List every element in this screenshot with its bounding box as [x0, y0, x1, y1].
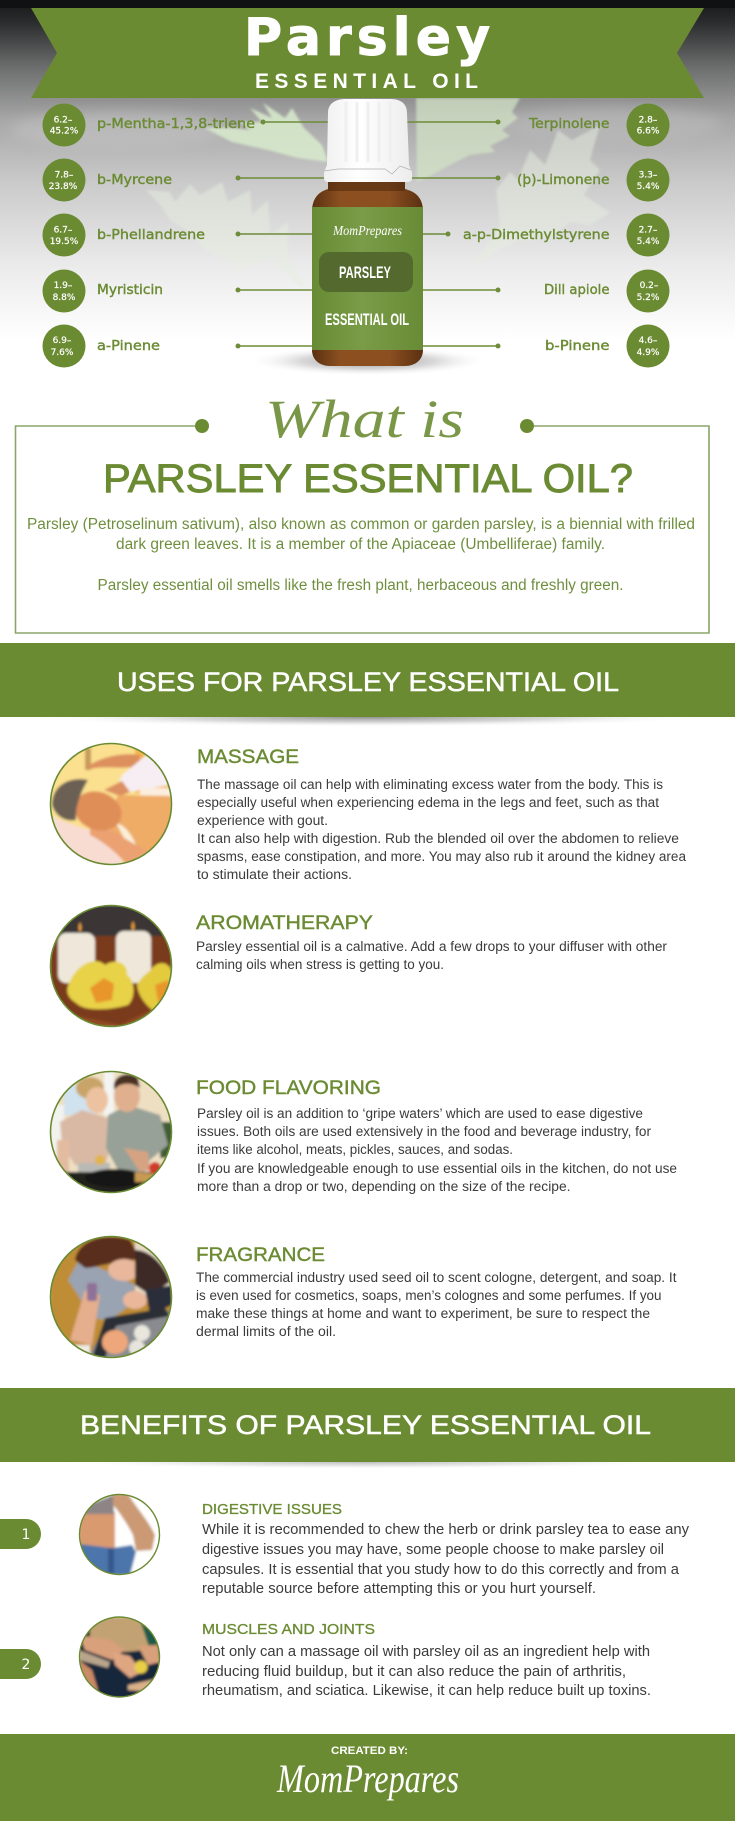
text: massage: MASSAGE	[197, 747, 299, 768]
bottle label: essential oil: ESSENTIAL OIL	[325, 310, 409, 329]
text: muscles and joints: reducing fluid buildup, but it can also reduce the pain of arthritis,	[202, 1664, 626, 1680]
footer	[0, 1734, 735, 1821]
tab: number 1: 1	[22, 1527, 30, 1543]
bottle shadow	[246, 346, 490, 376]
badge: Dill apiole: 0.2–	[640, 281, 659, 291]
description: dark green leaves. It is a member of the Apiaceae (Umbelliferae) family.	[116, 536, 605, 553]
photo: muscles and joints	[79, 1617, 162, 1698]
text: food flavoring: items like alcohol, meats, pickles, sauces, and sodas.	[197, 1142, 513, 1157]
section band: benefits	[0, 1388, 735, 1462]
text: digestive issues: While it is recommended to chew the herb or drink parsley tea to ease any	[202, 1522, 690, 1538]
badge: Myristicin: 8.8%	[53, 293, 76, 303]
text: massage: It can also help with digestion. Rub the blended oil over the abdomen to relieve	[197, 831, 679, 846]
text: muscles and joints	[202, 1622, 651, 1699]
badge: Limonene: 3.3–	[639, 170, 658, 180]
badge: Dill apiole: 5.2%	[637, 293, 660, 303]
text: massage: to stimulate their actions.	[197, 867, 352, 882]
icon: essential oil bottle	[312, 99, 423, 366]
badge: Terpinolene	[626, 104, 670, 146]
badge: a-Pinene: 6.9–	[53, 336, 72, 346]
text: massage	[197, 747, 686, 882]
badge: Myristicin: 1.9–	[54, 281, 73, 291]
badge: Terpinolene: 2.8–	[639, 116, 658, 126]
text: fragrance: dermal limits of the oil.	[196, 1324, 336, 1339]
badge: b-Phellandrene	[42, 214, 86, 256]
text: digestive issues: digestive issues you may have, some people choose to make parsley oil	[202, 1542, 664, 1558]
shadow under benefits band	[47, 1455, 687, 1469]
label: a-Pinene: a-Pinene	[97, 338, 160, 354]
shadow under uses band	[22, 707, 712, 727]
section band: benefits: BENEFITS OF PARSLEY ESSENTIAL OIL	[80, 1410, 651, 1440]
label: Dill apiole: Dill apiole	[544, 282, 610, 298]
text: digestive issues: capsules. It is essential that you study how to do this correctly and from a	[202, 1562, 680, 1578]
badge: b-Myrcene: 23.8%	[49, 182, 78, 192]
badge: Limonene	[626, 158, 670, 202]
text: fragrance: make these things at home and want to experiment, be sure to respect the	[196, 1306, 650, 1321]
badge: p-Mentha: 6.2–	[54, 116, 73, 126]
text: aromatherapy: calming oils when stress is getting to you.	[196, 957, 444, 972]
label: Dimethylstyrene: a-p-Dimethylstyrene	[463, 227, 610, 243]
title: Parsley	[244, 8, 490, 68]
text: muscles and joints: rheumatism, and sciatica. Likewise, it can help reduce built up toxins.	[202, 1683, 651, 1699]
badge: a-Pinene: 7.6%	[51, 348, 74, 358]
text: food flavoring: issues. Both oils are used extensively in the food and beverage industry, for	[197, 1124, 652, 1139]
bottle label: name: PARSLEY	[339, 263, 391, 282]
label: Limonene: (þ)-Limonene	[517, 172, 610, 188]
text: food flavoring: If you are knowledgeable enough to use essential oils in the kitchen, do not use	[197, 1161, 677, 1176]
text: aromatherapy: Parsley essential oil is a calmative. Add a few drops to your diffuser with other	[196, 939, 668, 954]
section band: uses	[0, 643, 735, 717]
text: fragrance	[196, 1245, 677, 1339]
subtitle: ESSENTIAL OIL	[255, 70, 478, 93]
badge: b-Myrcene: 7.8–	[55, 170, 74, 180]
badge: b-Pinene: 4.9%	[637, 348, 660, 358]
badge: a-Pinene	[42, 324, 86, 368]
badge: p-Mentha	[42, 104, 86, 146]
badge: Limonene: 5.4%	[637, 182, 660, 192]
text: fragrance: The commercial industry used seed oil to scent cologne, detergent, and soap. It	[196, 1270, 677, 1285]
heading: PARSLEY ESSENTIAL OIL?	[103, 457, 633, 501]
text: fragrance: is even used for cosmetics, soaps, men’s colognes and some perfumes. If you	[196, 1288, 662, 1303]
badge: Dimethylstyrene: 5.4%	[637, 237, 660, 247]
label: p-Mentha: p-Mentha-1,3,8-triene	[97, 116, 255, 132]
text: massage: experience with gout.	[197, 813, 328, 828]
badge: p-Mentha: 45.2%	[50, 126, 79, 136]
text: massage: The massage oil can help with eliminating excess water from the body. This is	[197, 777, 663, 792]
photo: digestive waist	[79, 1494, 160, 1575]
icon: parsley leaf top left	[205, 103, 328, 162]
text: muscles and joints: MUSCLES AND JOINTS	[202, 1622, 375, 1638]
section band: uses: USES FOR PARSLEY ESSENTIAL OIL	[117, 667, 619, 697]
label: b-Pinene: b-Pinene	[545, 338, 610, 354]
footer logo: MomPrepares	[276, 1756, 459, 1801]
text: digestive issues	[202, 1502, 690, 1597]
text: food flavoring	[196, 1078, 677, 1194]
badge: Dimethylstyrene: 2.7–	[639, 226, 658, 236]
banner: title ribbon	[31, 8, 704, 98]
chemical components right	[463, 104, 670, 368]
photo: food flavoring couple	[50, 1071, 174, 1194]
text: digestive issues: DIGESTIVE ISSUES	[202, 1502, 342, 1518]
label: b-Phellandrene: b-Phellandrene	[97, 227, 205, 243]
badge: b-Pinene: 4.6–	[639, 336, 658, 346]
badge: Dill apiole	[626, 270, 670, 312]
text: massage: spasms, ease constipation, and more. You may also rub it around the kidney area	[197, 849, 686, 864]
chemical components left	[42, 104, 255, 368]
badge: Dimethylstyrene	[626, 214, 670, 256]
badge: b-Phellandrene: 19.5%	[50, 237, 79, 247]
connector lines	[236, 120, 500, 348]
icon: parsley leaf top right	[416, 98, 520, 182]
text: digestive issues: reputable source before attempting this or you hurt yourself.	[202, 1581, 596, 1597]
badge: Terpinolene: 6.6%	[637, 126, 660, 136]
text: aromatherapy	[196, 913, 668, 972]
text: food flavoring: more than a drop or two, depending on the size of the recipe.	[197, 1179, 570, 1194]
text: aromatherapy: AROMATHERAPY	[196, 913, 373, 934]
badge: Myristicin	[42, 270, 86, 312]
badge: b-Pinene	[626, 324, 670, 368]
label: Myristicin: Myristicin	[97, 282, 163, 298]
badge: b-Phellandrene: 6.7–	[54, 226, 73, 236]
description: Parsley (Petroselinum sativum), also known as common or garden parsley, is a biennial with frilled	[27, 516, 695, 533]
text: food flavoring: Parsley oil is an addition to ‘gripe waters’ which are used to ease digestive	[197, 1106, 643, 1121]
text: muscles and joints: Not only can a massage oil with parsley oil as an ingredient help with	[202, 1644, 650, 1660]
text: food flavoring: FOOD FLAVORING	[196, 1078, 381, 1099]
description	[27, 516, 695, 594]
tab: number 2: 2	[22, 1657, 30, 1673]
heading script: What is	[265, 389, 464, 449]
label: b-Myrcene: b-Myrcene	[97, 172, 172, 188]
photo: fragrance woman	[50, 1236, 175, 1360]
tab: number 2	[0, 1649, 41, 1679]
text: fragrance: FRAGRANCE	[196, 1245, 325, 1266]
tab: number 1	[0, 1519, 41, 1549]
panel: what is parsley essential oil	[16, 389, 709, 633]
label: Terpinolene: Terpinolene	[528, 116, 610, 132]
bottle label: brand: MomPrepares	[332, 224, 402, 239]
icon: parsley leaf lower left	[146, 182, 305, 286]
footer credit label: CREATED BY:	[331, 1745, 408, 1757]
photo: massage	[50, 743, 175, 866]
photo: aromatherapy candles	[50, 905, 172, 1027]
panel: hero background	[0, 0, 735, 370]
description: Parsley essential oil smells like the fresh plant, herbaceous and freshly green.	[98, 577, 624, 594]
text: massage: especially useful when experiencing edema in the legs and feet, such as that	[197, 795, 659, 810]
badge: b-Myrcene	[42, 158, 86, 202]
icon: parsley leaf lower right	[472, 125, 610, 268]
